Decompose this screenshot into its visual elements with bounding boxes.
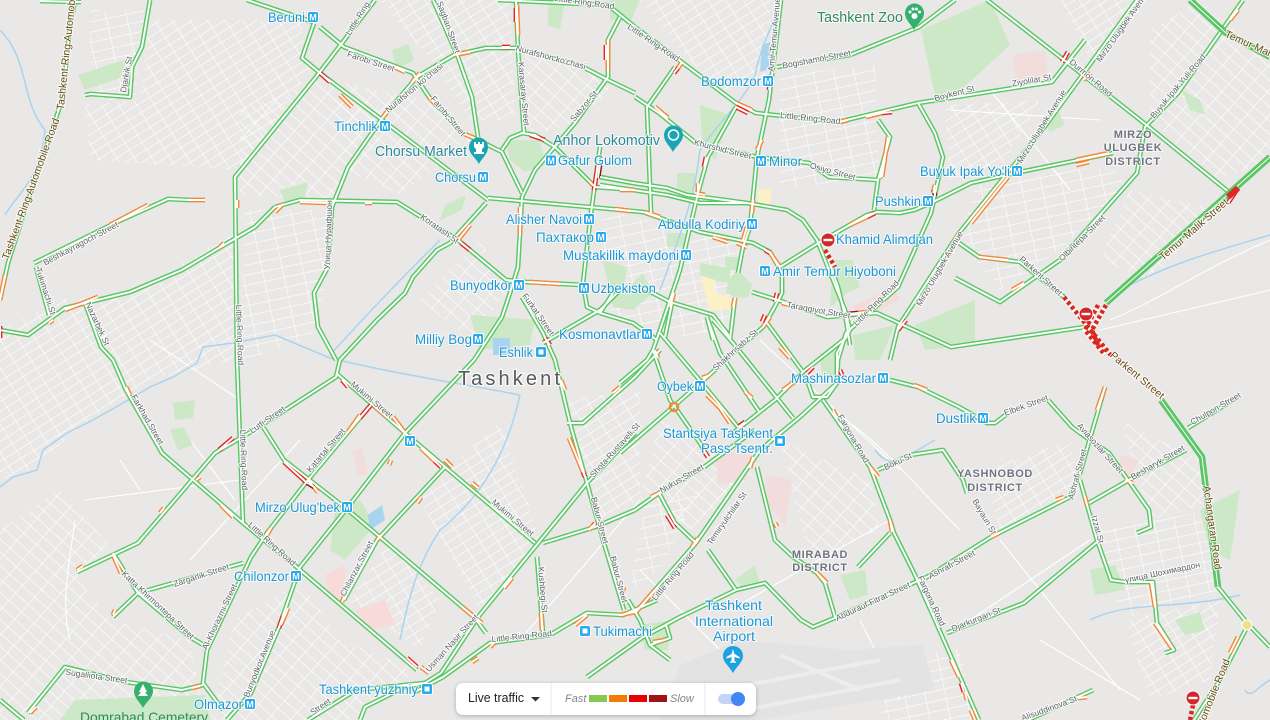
road labels: Nazarbek St	[83, 300, 112, 348]
road labels: Djarkurgan St	[950, 605, 1002, 634]
metro: Tinchlik: Tinchlik	[334, 118, 379, 134]
road closures: red dashed segments	[825, 250, 1193, 720]
road labels: Bayaun St	[970, 497, 999, 537]
road labels: Temiryulchilar St	[705, 489, 749, 547]
road labels: Little Ring Road	[649, 549, 696, 602]
road labels: Osiyo Street	[809, 160, 857, 182]
metro: Pushkin: Pushkin	[875, 193, 921, 209]
road labels: Mukimi Street	[490, 497, 537, 539]
road labels: Little Ring Road	[626, 21, 682, 64]
road labels: Usman Nasir Street	[423, 612, 481, 674]
road labels: Babur Street	[608, 555, 630, 604]
road labels: Nurafshon ko'chasi	[515, 43, 587, 71]
place: Anhor Lokomotiv: Anhor Lokomotiv	[553, 133, 661, 149]
metro: Mirzo Ulug'bek: Mirzo Ulug'bek	[255, 499, 341, 515]
road labels: Lutfi Street	[248, 403, 288, 435]
legend: layer dropdown: Live traffic	[468, 691, 524, 705]
road labels: Sabzor St	[568, 88, 600, 124]
legend: speed scale	[565, 693, 695, 705]
road labels: Mukimi Street	[349, 379, 396, 421]
road labels: Fargona Road	[916, 574, 948, 628]
road labels: Djarkik St	[118, 55, 134, 93]
metro: Khamid Alimdjan: Khamid Alimdjan	[836, 231, 933, 247]
metro: Kosmonavtlar: M	[643, 330, 651, 340]
city label: Tashkent: Tashkent	[458, 368, 560, 390]
rail station: Stantsiya Tashkent Pass Tsentr.: Pass Tsentr.	[701, 440, 773, 456]
metro: Olmazor: M	[246, 700, 254, 710]
place: Anhor Lokomotiv	[553, 126, 683, 152]
road labels: Little Ring Road	[246, 520, 298, 568]
metro: Uzbekiston: M	[580, 284, 588, 294]
road labels: Khurshid Street	[693, 137, 753, 161]
district label: Yashnobod: DISTRICT	[967, 482, 1023, 494]
metro: Beruni: Beruni	[268, 9, 305, 25]
metro: Amir Temur Hiyoboni: Amir Temur Hiyoboni	[773, 263, 896, 279]
metro: unnamed station: M	[406, 436, 414, 446]
road labels: Chulpon Street	[1188, 390, 1243, 427]
road labels: Besharyk Street	[1129, 443, 1187, 482]
metro: Mirzo Ulug'bek: M	[343, 502, 351, 512]
legend panel	[456, 683, 756, 715]
metro: Chorsu: M	[479, 172, 487, 182]
road labels: Taraqqiyot Street	[786, 300, 852, 321]
roundabout marker	[670, 403, 678, 411]
legend: speed scale: Fast	[565, 693, 587, 705]
road labels: Al-Khorazmi Street	[200, 582, 239, 651]
road labels: Izzat St	[1089, 514, 1107, 545]
metro: Bunyodkor: M	[515, 280, 523, 290]
district label: Yashnobod: YASHNOBOD	[957, 468, 1033, 480]
road labels: Little Ring Road	[780, 110, 841, 126]
road labels: Shota Rustaveli St	[588, 420, 642, 479]
metro: Alisher Navoi: Alisher Navoi	[506, 211, 582, 227]
metro: Bunyodkor: Bunyodkor	[450, 277, 512, 293]
road labels: Karasaray Street	[516, 62, 532, 127]
metro: Milliy Bog: Milliy Bog	[415, 331, 472, 347]
legend: traffic toggle	[718, 692, 745, 706]
district label: Mirzo Ulugbek: ULUGBEK	[1104, 142, 1162, 154]
metro: Minor: Minor	[769, 153, 802, 169]
road labels: Boku St	[882, 450, 914, 472]
metro: Dustlik: Dustlik	[936, 410, 977, 426]
road labels: Olbintepa Street	[1057, 212, 1108, 263]
district label: Mirabad: DISTRICT	[792, 562, 848, 574]
road labels: Fargona Road	[836, 412, 872, 465]
rail station: Stantsiya Tashkent Pass Tsentr.	[663, 425, 786, 456]
metro: Bodomzor: M	[764, 76, 772, 86]
metro: Pakhtakor: Пахтакор	[536, 229, 594, 245]
road labels: Little Ring Road	[238, 429, 250, 491]
airport label and pin	[695, 597, 773, 673]
road labels: Ashrafi Street	[1066, 447, 1089, 500]
road labels: Aviasozlar Street	[1075, 421, 1126, 476]
metro: Kosmonavtlar: Kosmonavtlar	[559, 326, 641, 342]
metro: Chilonzor: M	[292, 572, 300, 582]
road labels: улица Шохимардон	[1124, 559, 1201, 585]
road labels: Chilanzar Street	[338, 539, 375, 598]
road labels: Farkhad Street	[129, 393, 166, 447]
metro: Minor: M	[757, 156, 765, 166]
road labels: Temur Malik Street	[1157, 196, 1231, 263]
road labels: Tukimachi St	[34, 266, 58, 316]
icon: closure Parkent Street	[1079, 307, 1093, 321]
district label: Yashnobod	[957, 468, 1033, 494]
road labels: Elbek Street	[1003, 392, 1050, 418]
metro: Buyuk Ipak Yo'li: Buyuk Ipak Yo'li	[920, 163, 1010, 179]
road labels: Beshkayragoch Street	[41, 219, 120, 267]
metro: Bodomzor: Bodomzor	[701, 73, 761, 89]
metro: Mashinasozlar: Mashinasozlar	[791, 370, 876, 386]
airport label and pin: International	[695, 613, 773, 629]
legend: speed scale: Slow	[670, 693, 695, 705]
place: Tashkent Zoo: Tashkent Zoo	[817, 10, 903, 26]
district label: Mirabad: MIRABAD	[792, 549, 848, 561]
metro: Abdulla Kodiriy: Abdulla Kodiriy	[658, 216, 745, 232]
metro: Dustlik: M	[979, 414, 987, 424]
district label: Mirzo Ulugbek: DISTRICT	[1105, 156, 1161, 168]
road labels: Nukus Street	[658, 461, 706, 495]
metro: Mashinasozlar: M	[879, 374, 887, 384]
road labels: Boykent St	[933, 83, 976, 103]
district label: Mirzo Ulugbek	[1104, 129, 1162, 168]
metro: Oybek: M	[696, 382, 704, 392]
rail station: Stantsiya Tashkent Pass Tsentr.: Stantsiya Tashkent	[663, 425, 773, 441]
place: Chorsu Market: Chorsu Market	[375, 144, 467, 160]
metro: Buyuk Ipak Yo'li: M	[1013, 166, 1021, 176]
road labels: Babur Street	[589, 496, 611, 545]
road labels: Little Ring Road	[234, 304, 246, 366]
road labels: Mirzo Ulugbek Avenue	[914, 229, 965, 308]
metro: Mustakillik maydoni: Mustakillik maydoni	[563, 247, 679, 263]
road labels: Street	[308, 696, 333, 717]
road labels: Sagban Street	[435, 0, 463, 55]
road labels: Bogishamol Street	[781, 47, 852, 71]
metro: Gafur Gulom: M	[547, 156, 555, 166]
road labels: Bunyodkor Avenue	[241, 629, 277, 699]
rail station: Eshlik: Eshlik	[499, 344, 534, 360]
road labels: Ashrafi Street	[927, 548, 977, 581]
rail station: Tukimachi: Tukimachi	[593, 623, 652, 639]
icon: closure south east	[1186, 691, 1200, 705]
road labels: Little Ring Road	[491, 628, 553, 644]
metro: Alisher Navoi: M	[585, 214, 593, 224]
road labels: Kushbegi St	[536, 566, 550, 614]
metro: Uzbekiston: Uzbekiston	[591, 280, 656, 296]
metro: Chilonzor: Chilonzor	[234, 568, 289, 584]
metro: Beruni: M	[309, 12, 317, 22]
thick motorway segments	[1106, 0, 1270, 587]
road labels: Little Ring Road	[851, 278, 901, 328]
road labels: Nurafshon ko'chasi	[383, 61, 445, 115]
rail station: Tashkent yuzhniy: Tashkent yuzhniy	[319, 681, 418, 697]
airport label and pin: Airport	[713, 628, 755, 644]
road labels: Furkat Street	[520, 291, 557, 338]
metro: Tinchlik: M	[381, 122, 389, 132]
metro: Olmazor: Olmazor	[194, 696, 243, 712]
hospital and campus areas	[325, 50, 1140, 630]
metro: Mustakillik maydoni: M	[682, 250, 690, 260]
metro: Abdulla Kodiriy: M	[748, 220, 756, 230]
road labels: Buyuk Ipak Yuli Road	[1148, 52, 1208, 120]
place: Chorsu Market	[375, 138, 488, 164]
road labels: Farobi Street	[429, 94, 468, 139]
road labels: Parkent Street	[1017, 254, 1065, 298]
metro: Chorsu: Chorsu	[435, 169, 476, 185]
road labels: Mirzo Ulugbek Avenue	[1015, 88, 1068, 165]
metro: Minor	[756, 153, 802, 169]
road labels: Achangaran Road	[1200, 485, 1224, 570]
place: Domrabad Cemetery	[80, 682, 208, 720]
road labels: Katta Khirmontepa Street	[120, 569, 197, 641]
road labels: Farobi Street	[346, 49, 396, 74]
road labels: Shakhrisabz St	[710, 327, 760, 373]
metro: Pakhtakor: M	[597, 232, 605, 242]
metro: Amir Temur Hiyoboni: M	[761, 266, 769, 276]
airport grounds	[660, 640, 935, 720]
metro: Pushkin: M	[924, 196, 932, 206]
road labels: Abdurauf Fitrat Street	[834, 579, 912, 623]
place: Tashkent Zoo	[817, 4, 924, 30]
metro: Oybek: Oybek	[657, 378, 694, 394]
metro: unnamed station	[404, 436, 416, 446]
road labels: Katartal Street	[304, 426, 347, 474]
metro: Milliy Bog: M	[474, 334, 482, 344]
road labels: Little Ring	[343, 0, 372, 37]
icon: closure Khamid Alimdjan	[821, 233, 835, 247]
road labels: Ziyolilar St	[1011, 72, 1053, 88]
road labels: Durmon Road	[1067, 57, 1115, 99]
airport label and pin: Tashkent	[705, 597, 762, 613]
district label: Mirabad	[792, 549, 848, 574]
road labels: Tashkent Ring Automobile Road	[0, 117, 62, 261]
road labels: Sugalliota Street	[65, 667, 129, 685]
road labels: Улица Нурафшон	[322, 200, 334, 270]
road labels: Parkent Street	[1107, 350, 1167, 402]
district label: Mirzo Ulugbek: MIRZO	[1114, 129, 1152, 141]
metro: Gafur Gulom: Gafur Gulom	[558, 152, 632, 168]
road labels: Koratash St	[419, 212, 461, 246]
road labels: Zargarlik Street	[172, 561, 231, 589]
icon: south-east roundabout	[1242, 620, 1252, 630]
